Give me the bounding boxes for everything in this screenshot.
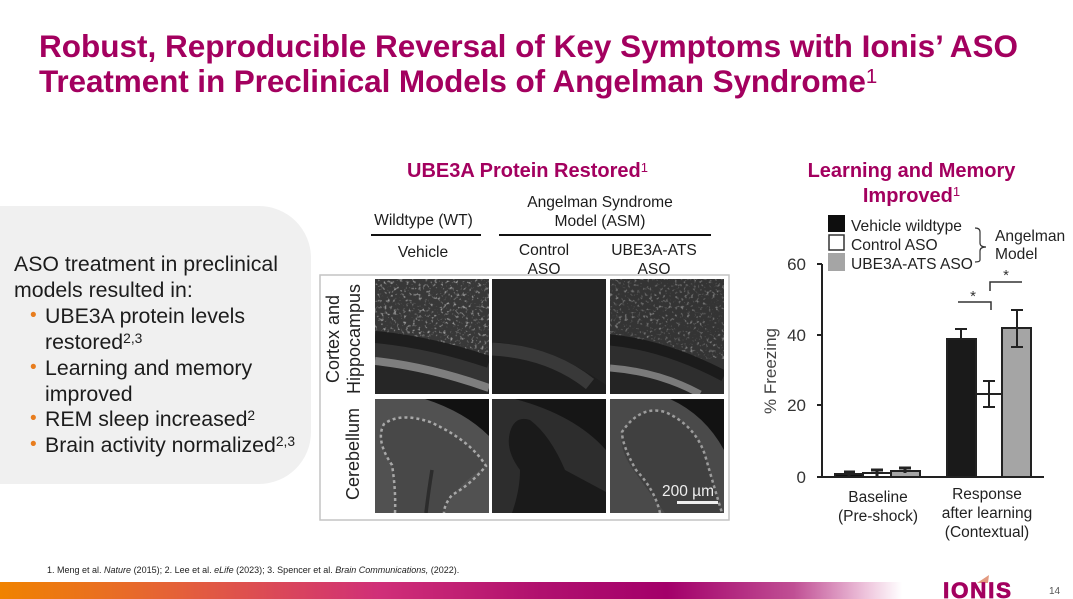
bullet: sleep: REM sleep increased2: [45, 407, 255, 431]
bullet: learning: improved: [45, 382, 133, 406]
x label: response: Response: [952, 486, 1022, 503]
panel: cortex treated: [610, 279, 724, 394]
error bars: [955, 310, 1023, 407]
legend: UBE3A-ATS ASO: [851, 256, 973, 273]
footnote: 1. Meng et al. Nature (2015); 2. Lee et al. eLife (2023); 3. Spencer et al. Brain Communications, (2022).: [47, 565, 459, 575]
summary intro text: [14, 252, 278, 302]
significance stars: *: [970, 288, 976, 305]
label: control ASO: [519, 242, 569, 278]
summary intro text: ASO treatment in preclinical: [14, 252, 278, 276]
panel: cerebellum wildtype: [375, 399, 489, 513]
panel: summary: •: [30, 434, 37, 455]
bullet: protein: [30, 304, 245, 354]
divider: wildtype: [371, 234, 481, 236]
bullet: learning: [30, 356, 252, 406]
panel: cerebellum treated: [610, 399, 724, 513]
x label: baseline: Baseline: [848, 489, 908, 506]
bullet: protein: UBE3A protein levels: [45, 304, 245, 328]
bullet: brain activity: Brain activity normalized2,3: [45, 433, 295, 457]
bar chart: freezing: (Contextual): [945, 524, 1029, 541]
legend: [828, 215, 1065, 273]
row label: cerebellum: Cerebellum: [343, 408, 363, 500]
legend: Control ASO: [851, 237, 938, 254]
axis tick labels: 20: [787, 396, 806, 415]
axis tick labels: 60: [787, 255, 806, 274]
row label: hippocampus: Hippocampus: [344, 284, 364, 394]
footer gradient band: [0, 582, 902, 599]
microscopy figure: [319, 274, 730, 521]
baseline bars: [835, 468, 920, 477]
page number: 14: [1049, 586, 1060, 597]
bar chart: freezing: (Pre-shock): [838, 508, 918, 525]
label: wildtype: Wildtype (WT): [374, 212, 473, 229]
title: [39, 28, 1018, 99]
panel: summary: •: [30, 357, 37, 378]
label: UBE3A-ATS ASO: [611, 242, 697, 278]
summary intro text: models resulted in:: [14, 278, 193, 302]
heading: learning and memory: [808, 160, 1016, 206]
axis tick labels: 40: [787, 326, 806, 345]
bullet: protein: restored2,3: [45, 330, 142, 354]
logo: Ionis: [943, 575, 1013, 599]
label: control ASO: ASO: [528, 261, 560, 278]
legend: Angelman: [995, 228, 1065, 245]
title: Robust, Reproducible Reversal of Key Symptoms with Ionis’ ASO: [39, 28, 1018, 64]
panel: summary: •: [30, 408, 37, 429]
bar chart: freezing: after learning: [942, 505, 1032, 522]
heading: learning and memory: Improved1: [863, 184, 960, 206]
legend: Model: [995, 246, 1037, 263]
label: ASM group: Angelman Syndrome: [527, 194, 673, 211]
bullet: learning: Learning and memory: [45, 356, 252, 380]
heading: protein restored: UBE3A Protein Restored1: [407, 160, 648, 182]
heading: learning and memory: Learning and Memory: [808, 160, 1015, 182]
title: Treatment in Preclinical Models of Angelman Syndrome1: [39, 63, 877, 99]
legend: Vehicle wildtype: [851, 218, 962, 235]
panel: summary: [0, 206, 311, 484]
bar chart: freezing: [761, 215, 1065, 541]
divider: ASM: [499, 234, 711, 236]
significance brackets: [958, 282, 1022, 310]
scale bar: 200 µm: [662, 483, 714, 500]
axis tick labels: [787, 255, 806, 487]
panel: summary: •: [30, 305, 37, 326]
label: ASM group: [527, 194, 673, 230]
logo feather: [977, 575, 989, 583]
axis title: % Freezing: [761, 328, 780, 414]
panel: cerebellum control: [492, 399, 606, 513]
significance stars: [970, 267, 1009, 305]
panel: cortex control: [492, 279, 606, 394]
label: UBE3A-ATS ASO: UBE3A-ATS: [611, 242, 697, 259]
axis tick labels: 0: [797, 468, 806, 487]
panel: cortex wildtype: [375, 279, 489, 394]
label: ASM group: Model (ASM): [554, 213, 645, 230]
label: vehicle: Vehicle: [398, 244, 448, 261]
label: control ASO: Control: [519, 242, 569, 259]
label: UBE3A-ATS ASO: ASO: [638, 261, 670, 278]
significance stars: *: [1003, 267, 1009, 284]
response bars: [947, 328, 1031, 477]
row label: cortex and hippocampus: Cortex and: [323, 295, 343, 383]
axes: [817, 264, 1044, 477]
